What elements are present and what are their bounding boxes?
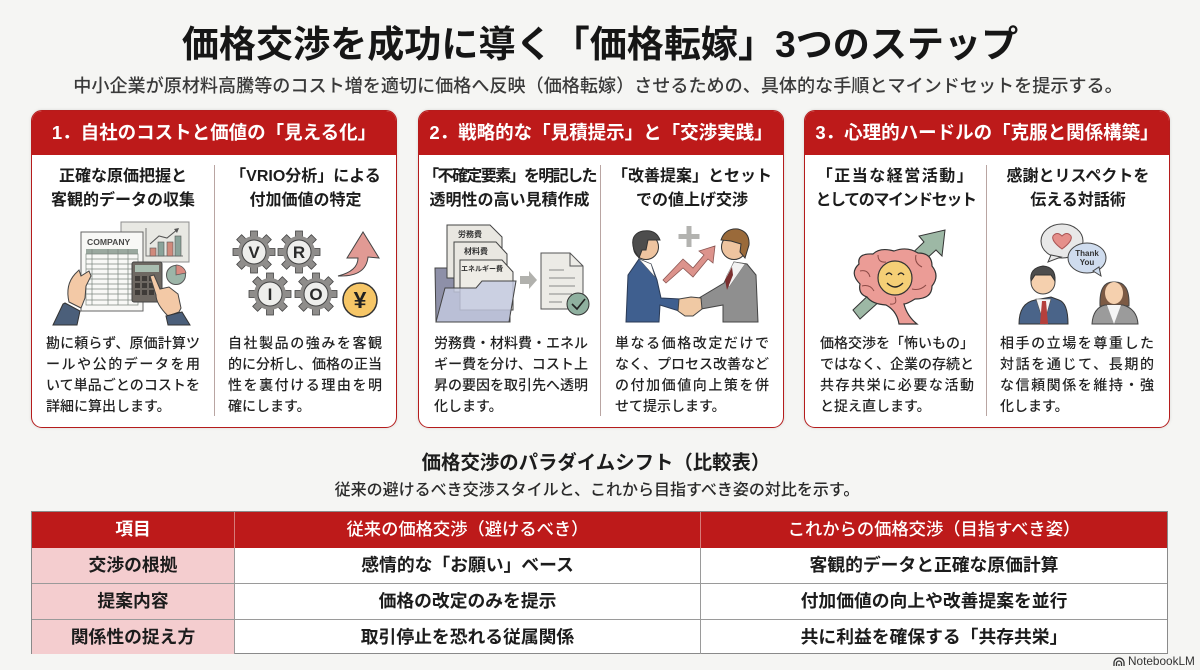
icon: VRIO gears and yen: V [248,243,260,262]
row 2 new: 付加価値の向上や改善提案を並行 [801,591,1067,611]
panel: step 2 [418,110,784,428]
comparison description: 従来の避けるべき交渉スタイルと、これから目指すべき姿の対比を示す。 [335,482,859,499]
step 2 right body text: なく、プロセス改善など [615,356,769,372]
step 3 right subheading [1006,167,1149,209]
step 2 right body text: 単なる価格改定だけで [615,335,769,351]
step 3 right body text: 対話を通じて、長期的 [1000,356,1154,372]
icon: VRIO gears and yen: R [293,243,305,262]
header: new negotiation: これからの価格交渉（目指すべき姿） [788,519,1080,539]
row label column [32,548,234,654]
icon: handshake with rising arrow [626,226,758,322]
row 2 old: 価格の改定のみを提示 [379,591,556,611]
step 1 left body text [46,335,200,414]
step 2 right body text: の付加価値向上策を併 [615,377,769,393]
icon: two people exchanging thanks: You [1080,258,1094,267]
panel: step 3 [804,110,1170,428]
step 2 left subheading [423,167,596,209]
step 3 left subheading: 「正当な経営活動」 [817,168,974,185]
step 2 left subheading: 「不確定要素」を明記した [423,168,596,185]
step 3 left subheading [815,167,976,209]
step 1 heading [32,111,396,155]
step 2 left body text [434,335,588,414]
step 2 right subheading: 「改善提案」とセット [612,168,772,185]
step 3 left body text: 共存共栄に必要な活動 [820,377,974,393]
step 3 left body text: ではなく、企業の存続と [820,356,974,372]
step 1 right body text: 確にします。 [228,398,311,414]
step 1 left body text: いて単品ごとのコストを [46,377,200,393]
icon: two people exchanging thanks: Thank [1075,249,1099,258]
step 1 left body text: 勘に頼らず、原価計算ツ [46,335,200,351]
row 3 label: 関係性の捉え方 [71,627,195,647]
comparison table [31,511,1168,654]
icon: folder of cost documents to estimate: 労務費 [458,229,482,239]
row 3 old: 取引停止を恐れる従属関係 [361,627,574,647]
icon: two people exchanging thanks [1018,224,1138,325]
icon: brain with smile and rising arrow [852,229,946,325]
step 2 left body text: ギー費を分け、コスト上 [434,356,588,372]
subtitle: 中小企業が原材料高騰等のコスト増を適切に価格へ反映（価格転嫁）させるための、具体的な手順とマインドセットを提示する。 [73,76,1123,96]
step 2 left subheading: 透明性の高い見積作成 [429,192,590,209]
step 3 heading: 3．心理的ハードルの「克服と関係構築」 [815,122,1159,143]
step 3 left subheading: としてのマインドセット [815,192,976,209]
step 1 right body text [228,335,382,414]
icon: folder of cost documents to estimate [434,224,590,322]
row 1 old: 感情的な「お願い」ベース [361,555,574,575]
icon: documents, calculator and hands [52,222,191,326]
step 2 left body text: 化します。 [434,398,503,414]
step 1 right subheading [230,167,381,209]
icon: documents, calculator and hands: COMPANY [87,237,131,247]
step 2 right subheading: での値上げ交渉 [636,192,748,209]
icon: folder of cost documents to estimate: 材料費 [464,246,488,256]
title: 価格交渉を成功に導く「価格転嫁」3つのステップ [182,23,1018,65]
icon: VRIO gears and yen [232,230,380,318]
row 2 label: 提案内容 [97,591,169,611]
step 1 right body text: 的に分析し、価格の正当 [228,356,382,372]
watermark: NotebookLM: NotebookLM [1128,654,1195,668]
step 3 left body text [820,335,974,414]
row 1 new: 客観的データと正確な原価計算 [810,555,1058,575]
step 3 right body text: な信頼関係を維持・強 [1000,377,1154,393]
step 3 right body text: 化します。 [1000,398,1069,414]
panel: step 1 [31,110,397,428]
step 3 right subheading: 伝える対話術 [1030,192,1126,209]
icon: VRIO gears and yen: ¥ [354,287,367,313]
row 3 new: 共に利益を確保する「共存共栄」 [801,627,1067,647]
step 3 heading [805,111,1169,155]
step 3 right subheading: 感謝とリスペクトを [1007,168,1149,185]
step 2 right body text: せて提示します。 [615,398,726,414]
row 1 label: 交渉の根拠 [89,555,177,575]
step 1 right subheading: 「VRIO分析」による [230,168,381,185]
step 2 left body text: 昇の要因を取引先へ透明 [434,377,588,393]
step 1 left subheading: 客観的データの収集 [51,192,195,209]
step 1 left subheading: 正確な原価把握と [59,168,187,185]
icon: VRIO gears and yen: O [309,285,323,304]
step 3 right body text: 相手の立場を尊重した [1000,335,1154,351]
icon: VRIO gears and yen: I [268,285,272,304]
step 2 right subheading [612,167,772,209]
header: item: 項目 [115,519,151,539]
step 1 right body text: 性を裏付ける理由を明 [228,377,382,393]
step 2 right body text [615,335,769,414]
step 2 heading [419,111,783,155]
step 3 left body text: 価格交渉を「怖いもの」 [820,335,974,351]
step 1 left subheading [51,167,195,209]
step 1 right body text: 自社製品の強みを客観 [228,335,382,351]
header: old negotiation: 従来の価格交渉（避けるべき） [347,519,588,539]
step 3 left body text: と捉え直します。 [820,398,931,414]
step 2 left body text: 労務費・材料費・エネル [434,335,588,351]
icon: folder of cost documents to estimate: エネルギー費 [461,264,503,273]
step 1 left body text: ールや公的データを用 [46,356,200,372]
step 1 left body text: 詳細に算出します。 [46,398,171,414]
step 1 heading: 1．自社のコストと価値の「見える化」 [52,122,376,143]
step 3 right body text [1000,335,1154,414]
comparison heading: 価格交渉のパラダイムシフト（比較表） [422,452,770,474]
step 2 heading: 2．戦略的な「見積提示」と「交渉実践」 [429,122,773,143]
step 1 right subheading: 付加価値の特定 [249,192,362,209]
table header row [32,512,1167,548]
